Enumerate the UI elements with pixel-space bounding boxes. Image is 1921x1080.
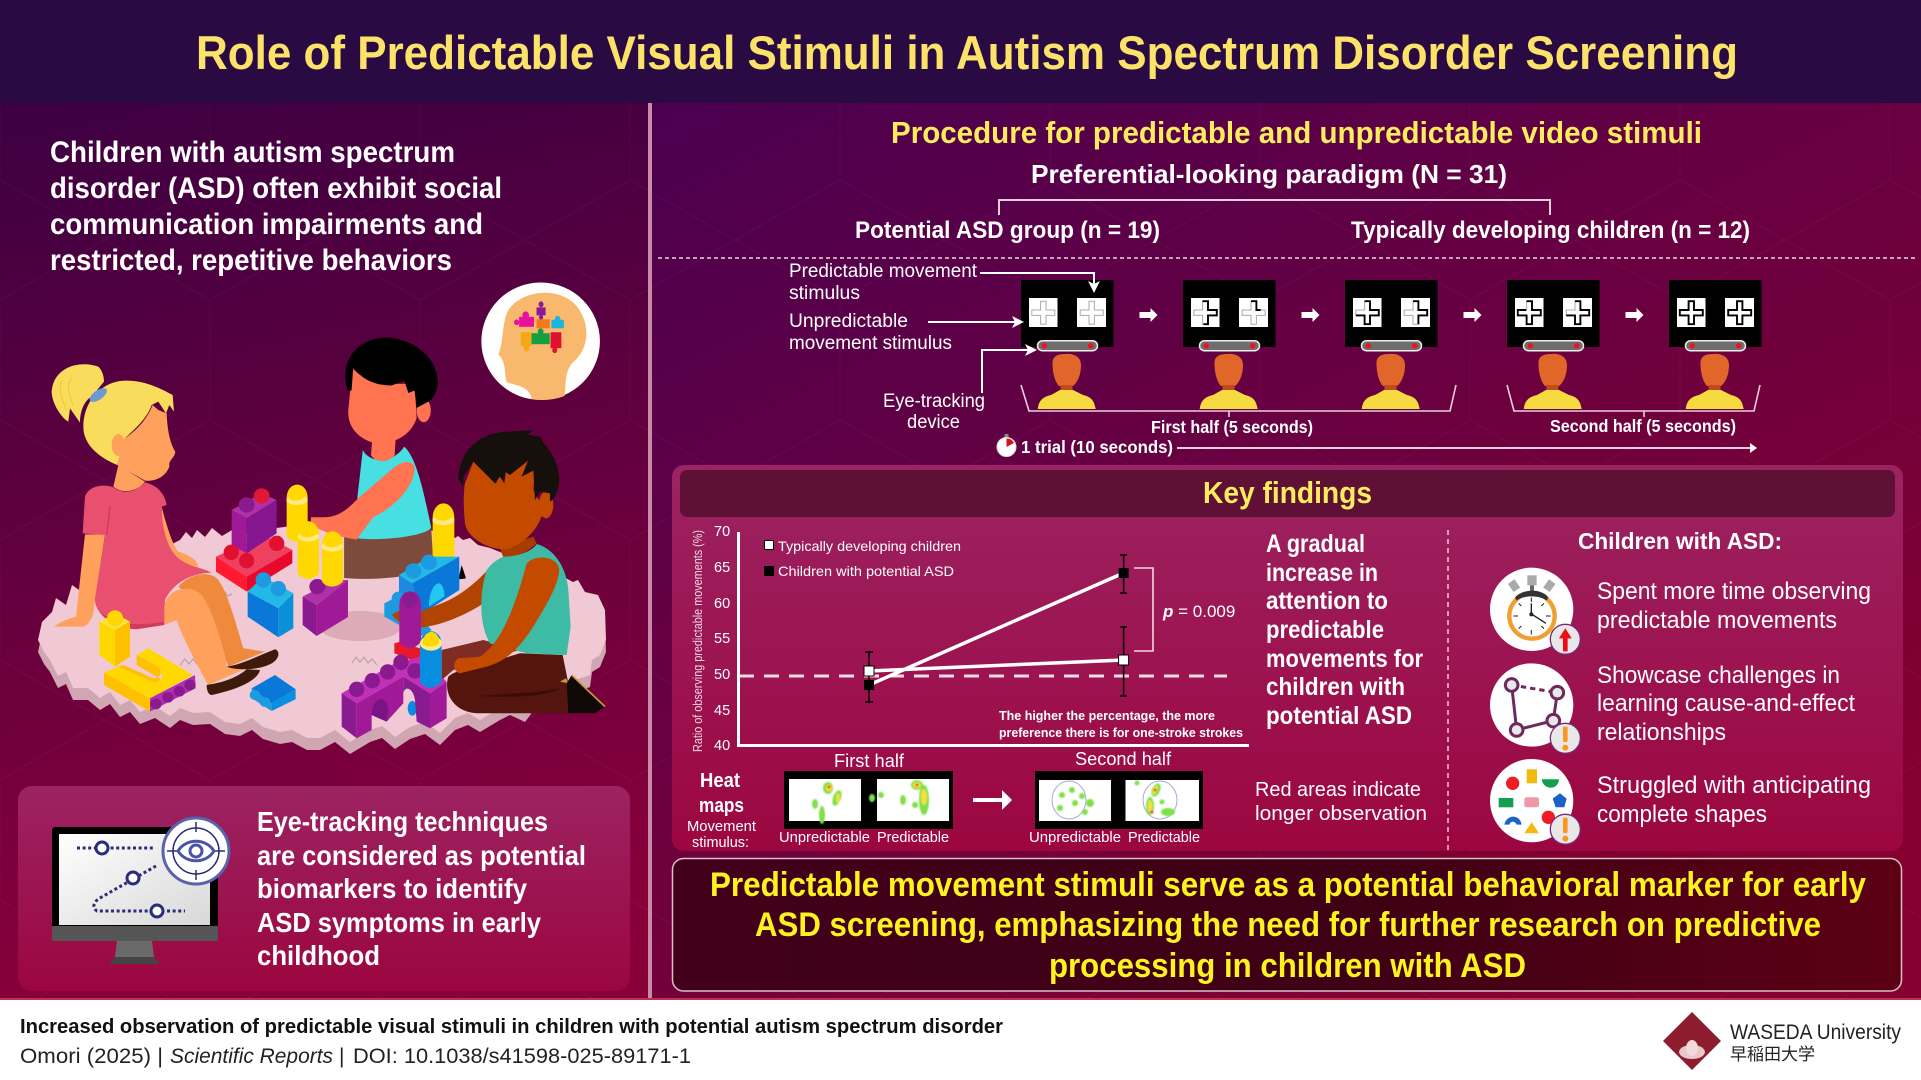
subheading: paradigm: Preferential-looking paradigm (N = 31) <box>1031 159 1507 189</box>
text: learning cause-and-effect <box>1597 690 1855 717</box>
panel: left background intro text: Children with autism spectrum <box>50 136 455 169</box>
label: first half: First half (5 seconds) <box>1151 417 1313 437</box>
arrows: callout leaders <box>928 273 1100 393</box>
labels: stimulus callouts: movement stimulus <box>789 333 952 354</box>
text: gradual increase takeaway: increase in <box>1266 559 1378 587</box>
rug <box>38 520 606 754</box>
labels: stimulus callouts: Eye-tracking <box>883 391 985 412</box>
line chart: 60 <box>714 596 730 612</box>
labels: stimulus callouts: Unpredictable <box>789 311 908 332</box>
footer citation <box>20 1016 1003 1068</box>
footer citation: | <box>339 1045 344 1068</box>
group label: potential ASD: Potential ASD group (n = 19) <box>855 217 1160 244</box>
text: eye-tracking statement: are considered as potential <box>257 840 586 871</box>
icon: monitor with gaze path <box>52 818 229 964</box>
line chart <box>690 524 1249 754</box>
panel: key findings <box>672 465 1903 851</box>
heat maps: Unpredictable <box>1029 829 1121 846</box>
figure: boy in cyan shirt <box>311 338 438 579</box>
legend: Children with potential ASD <box>778 563 954 579</box>
bracket: groups <box>999 200 1550 215</box>
text: relationships <box>1597 719 1726 746</box>
chart note <box>999 708 1243 740</box>
text: heat map note: longer observation <box>1255 803 1427 825</box>
icon: assorted shapes <box>1490 759 1580 844</box>
labels: stimulus callouts: stimulus <box>789 283 860 304</box>
chart note: The higher the percentage, the more <box>999 708 1215 723</box>
panel: left background intro text: disorder (ASD) often exhibit social <box>50 172 502 205</box>
group label: typically developing: Typically developing children (n = 12) <box>1351 217 1750 244</box>
text <box>1597 772 1871 828</box>
heat maps: First half <box>834 751 905 771</box>
heat maps: Unpredictable <box>779 829 870 846</box>
panel: left background intro text: restricted, repetitive behaviors <box>50 244 452 277</box>
legend: Typically developing children <box>778 538 961 554</box>
text: heat map note <box>1255 779 1427 825</box>
line chart: 40 <box>714 738 730 754</box>
text: Struggled with anticipating <box>1597 772 1871 799</box>
text: gradual increase takeaway: movements for <box>1266 645 1423 673</box>
text: gradual increase takeaway: A gradual <box>1266 530 1365 558</box>
legend <box>764 538 961 579</box>
heat maps: Predictable <box>1128 829 1200 846</box>
heading: children with ASD: Children with ASD: <box>1578 528 1782 554</box>
brackets: first and second half <box>1021 385 1760 417</box>
heat maps: Second half <box>1075 749 1172 769</box>
heading: procedure: Procedure for predictable and unpredictable video stimuli <box>891 115 1702 150</box>
labels: stimulus callouts: Predictable movement <box>789 261 978 282</box>
line chart: 50 <box>714 667 730 683</box>
panel: conclusion: ASD screening, emphasizing the need for further research on predictive <box>755 906 1821 944</box>
p-value bracket <box>1134 568 1235 651</box>
arrow: trial timeline <box>1177 443 1757 453</box>
text <box>1597 662 1855 746</box>
icon: head with puzzle brain <box>481 283 600 400</box>
icon: broken loop <box>1490 663 1580 753</box>
text <box>1597 578 1871 634</box>
heat maps <box>687 749 1203 851</box>
panel: eye-tracking biomarkers <box>18 786 630 991</box>
heat maps: Predictable <box>877 829 949 846</box>
header banner <box>0 0 1921 103</box>
line chart: 65 <box>714 560 730 576</box>
heading: key findings: Key findings <box>1203 475 1372 510</box>
heat maps: Heat <box>700 770 740 792</box>
panel: conclusion: processing in children with ASD <box>1049 947 1526 985</box>
text: Showcase challenges in <box>1597 662 1840 689</box>
panel: conclusion <box>672 858 1902 991</box>
footer citation: Increased observation of predictable visual stimuli in children with potential autism spectrum disorder <box>20 1016 1003 1038</box>
label: second half: Second half (5 seconds) <box>1550 416 1736 436</box>
text: gradual increase takeaway: children with <box>1266 673 1405 701</box>
text: predictable movements <box>1597 607 1837 634</box>
text: eye-tracking statement: childhood <box>257 940 380 971</box>
logo: Waseda University: 早稲田大学 <box>1730 1045 1815 1064</box>
footer citation: Scientific Reports <box>170 1045 333 1068</box>
footer citation: DOI: 10.1038/s41598-025-89171-1 <box>353 1045 691 1068</box>
line chart: 55 <box>714 631 730 647</box>
panel: left background intro text: communication impairments and <box>50 208 483 241</box>
arrows between screens <box>1140 308 1644 322</box>
text: gradual increase takeaway: attention to <box>1266 587 1388 615</box>
text: complete shapes <box>1597 801 1767 828</box>
text: eye-tracking statement: biomarkers to identify <box>257 873 527 904</box>
text: Spent more time observing <box>1597 578 1871 605</box>
line chart: 45 <box>714 703 730 719</box>
labels: stimulus callouts <box>789 261 985 433</box>
text: gradual increase takeaway: potential ASD <box>1266 702 1412 730</box>
figure: girl in pink dress <box>52 364 278 695</box>
title: Role of Predictable Visual Stimuli in Autism Spectrum Disorder Screening <box>196 26 1738 79</box>
finding 3: shapes <box>1490 759 1871 844</box>
text: heat map note: Red areas indicate <box>1255 779 1421 801</box>
footer citation: Omori (2025) | <box>20 1045 163 1068</box>
heat maps: stimulus: <box>692 834 749 851</box>
illustration: children playing with blocks on a rug <box>38 283 606 754</box>
text: eye-tracking statement: Eye-tracking techniques <box>257 806 548 837</box>
finding 1: stopwatch <box>1490 568 1871 654</box>
label: one trial: 1 trial (10 seconds) <box>1021 437 1173 457</box>
diagram: trial sequence of viewers and stimuli <box>1021 280 1762 409</box>
icon: stopwatch up arrow <box>1490 568 1580 654</box>
logo: Waseda University: WASEDA University <box>1730 1021 1901 1044</box>
p-value bracket: p = 0.009 <box>1162 602 1235 621</box>
text: eye-tracking statement <box>257 806 586 971</box>
blocks: central block pile <box>216 485 348 637</box>
icon: stopwatch <box>997 434 1016 456</box>
blocks: left yellow blocks <box>99 610 296 712</box>
heat maps: maps <box>699 795 744 817</box>
line chart: Ratio of observing predictable movements (%) <box>690 530 705 752</box>
labels: stimulus callouts: device <box>907 412 960 433</box>
line chart: 70 <box>714 524 730 540</box>
chart note: preference there is for one-stroke strokes <box>999 725 1243 740</box>
finding 2: cause and effect <box>1490 662 1855 753</box>
heat maps: Movement <box>687 818 757 835</box>
panel: left background intro text <box>50 136 502 277</box>
text: gradual increase takeaway <box>1266 530 1423 730</box>
logo: Waseda University <box>1663 1012 1901 1070</box>
icon: eye target <box>163 818 229 884</box>
text: eye-tracking statement: ASD symptoms in early <box>257 907 541 938</box>
text: gradual increase takeaway: predictable <box>1266 616 1384 644</box>
figure: boy in green shirt with castle blocks <box>342 430 605 738</box>
